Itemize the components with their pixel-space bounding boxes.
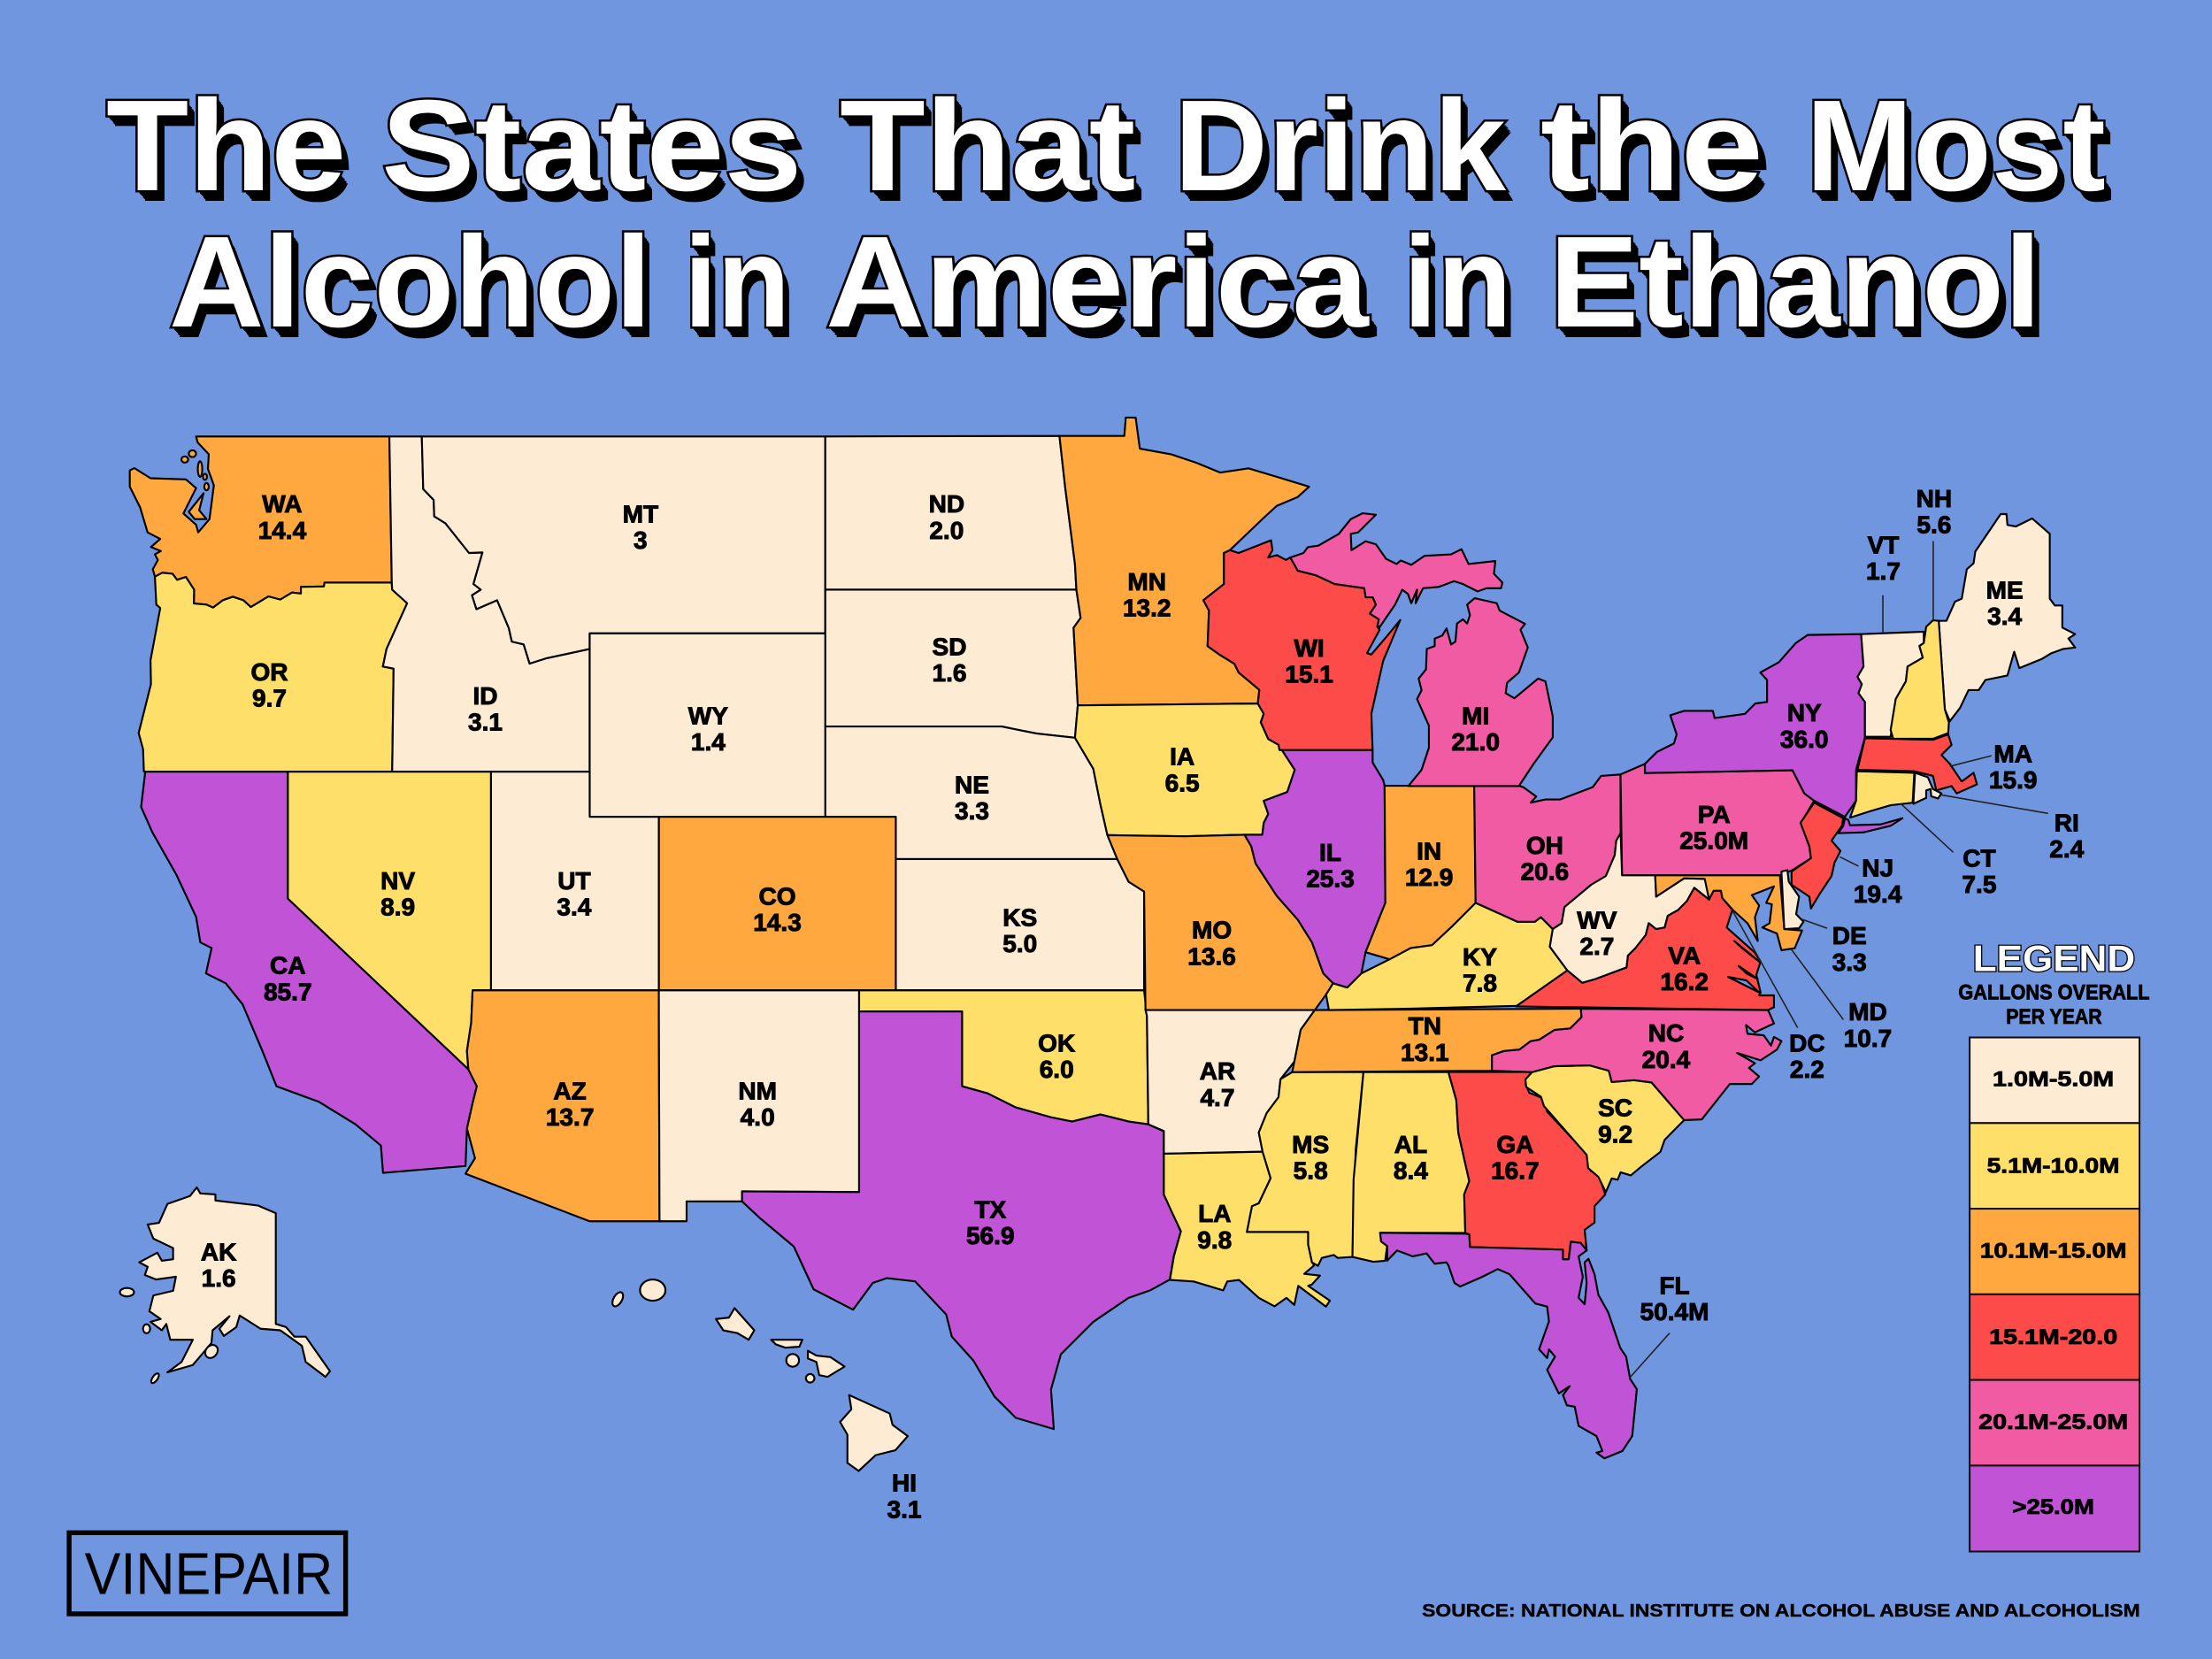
state: Arizona: AZ (553, 1078, 587, 1105)
state: Idaho: ID (472, 682, 498, 710)
state: Oklahoma (859, 990, 1148, 1125)
state: Pennsylvania (1620, 764, 1814, 875)
title line 1: States (381, 73, 803, 219)
state: North Dakota: 2.0 (929, 517, 964, 544)
state: North Carolina: 20.4 (1642, 1046, 1691, 1073)
state: Kentucky: 7.8 (1463, 970, 1497, 997)
state: South Dakota: 1.6 (933, 659, 967, 687)
state: Alabama (1353, 1072, 1470, 1262)
state: Mississippi: MS (1292, 1131, 1329, 1158)
state: Massachusetts: MA (1993, 740, 2032, 767)
state: Mississippi (1247, 1072, 1363, 1266)
state: New Hampshire: NH (1916, 485, 1952, 512)
state: District of Columbia (1732, 909, 1825, 1083)
state: Wisconsin: 15.1 (1285, 661, 1333, 688)
state: New Hampshire: 5.6 (1916, 511, 1951, 539)
state: Louisiana: LA (1198, 1200, 1231, 1227)
state: Missouri (1108, 834, 1333, 1010)
title (105, 73, 2111, 355)
state: Washington (130, 436, 392, 608)
state: Kansas: KS (1002, 903, 1037, 931)
title line 1: The (106, 73, 346, 219)
state: Florida (1380, 1233, 1709, 1458)
state: Georgia: 16.7 (1491, 1157, 1540, 1185)
state: Florida: FL (1659, 1272, 1690, 1300)
state: Alaska (120, 1187, 330, 1385)
state: Nevada: 8.9 (380, 894, 415, 921)
state: Indiana: IN (1417, 837, 1441, 864)
title line 1: That (840, 73, 1135, 219)
state: South Carolina: 9.2 (1598, 1120, 1632, 1148)
state: South Dakota: SD (933, 633, 967, 660)
title line 1: the (1540, 73, 1763, 219)
state: Texas (742, 1011, 1181, 1429)
state: Virginia: VA (1668, 941, 1701, 969)
state: West Virginia: 2.7 (1579, 933, 1614, 960)
state: Maine (1939, 514, 2075, 721)
state: Montana: 3 (634, 526, 648, 554)
state: Minnesota: MN (1127, 568, 1166, 595)
state: Michigan: MI (1462, 702, 1489, 729)
state: New Jersey: 19.4 (1854, 880, 1902, 908)
state: New York: 36.0 (1780, 726, 1829, 753)
title line 1 (105, 73, 2111, 219)
state: Illinois: 25.3 (1306, 865, 1355, 893)
state: Iowa: IA (1170, 743, 1194, 771)
legend row 1 (1970, 1038, 2139, 1123)
state: Arizona: 13.7 (546, 1103, 594, 1131)
legend row 5 (1970, 1380, 2139, 1465)
state: North Carolina: NC (1648, 1019, 1684, 1047)
state: Tennessee (1292, 1009, 1581, 1072)
state: Oregon (139, 572, 407, 772)
state: Wisconsin: WI (1294, 634, 1325, 662)
state: Georgia (1448, 1072, 1605, 1259)
state: Oklahoma: OK (1038, 1029, 1075, 1056)
state: Hawaii: HI (892, 1470, 917, 1497)
state: Massachusetts: 15.9 (1989, 766, 2037, 794)
state: New Jersey: NJ (1862, 855, 1893, 882)
state: Arkansas: AR (1200, 1057, 1235, 1085)
state: Idaho (383, 436, 589, 772)
state: Mississippi: 5.8 (1294, 1157, 1328, 1185)
title line 2: Ethanol (1549, 210, 2041, 355)
state: South Carolina: SC (1598, 1094, 1632, 1122)
state: Connecticut: CT (1962, 844, 1996, 872)
state: Pennsylvania: 25.0M (1679, 827, 1748, 855)
state: Maryland: MD (1848, 998, 1887, 1025)
title line 2 (169, 210, 2041, 355)
state: Nebraska (826, 726, 1118, 859)
state: District of Columbia: DC (1789, 1029, 1825, 1056)
state: Alaska: 1.6 (202, 1264, 236, 1292)
state: Alaska: AK (201, 1238, 236, 1265)
state: New Hampshire (1891, 485, 1952, 739)
state: Rhode Island (1913, 772, 2085, 863)
state: Oregon: OR (250, 658, 288, 686)
state: Tennessee: 13.1 (1401, 1039, 1449, 1066)
state: Vermont: 1.7 (1866, 557, 1901, 585)
source note: SOURCE: NATIONAL INSTITUTE ON ALCOHOL ABUSE AND ALCOHOLISM (1422, 1601, 2140, 1621)
state: Indiana (1365, 786, 1476, 959)
state: Delaware: 3.3 (1832, 949, 1867, 976)
state: Pennsylvania: PA (1698, 801, 1731, 828)
state: Idaho: 3.1 (468, 709, 503, 736)
state: New York: NY (1787, 699, 1822, 726)
state: Illinois (1245, 745, 1386, 987)
state: Arkansas (1146, 1010, 1315, 1154)
state: Kentucky (1326, 902, 1567, 1010)
state: North Carolina (1492, 1009, 1781, 1120)
legend row 2: 5.1M-10.0M (1987, 1155, 2120, 1179)
legend row 3: 10.1M-15.0M (1980, 1239, 2127, 1263)
state: Wisconsin (1203, 541, 1401, 750)
state: Minnesota (1059, 418, 1310, 705)
state: West Virginia: WV (1577, 907, 1617, 934)
state: Maryland (1655, 875, 1892, 1052)
state: Ohio: OH (1526, 832, 1563, 859)
legend heading: LEGEND (1973, 938, 2135, 979)
state: Tennessee: TN (1409, 1012, 1441, 1040)
state: New Mexico (659, 990, 859, 1221)
legend row 1: 1.0M-5.0M (1993, 1068, 2114, 1092)
state: Maine: ME (1986, 576, 2024, 603)
state: Nevada: NV (380, 867, 415, 895)
state: Delaware (1781, 870, 1867, 976)
state: Vermont: VT (1868, 531, 1899, 558)
title line 2: in (1403, 210, 1512, 355)
legend row 5: 20.1M-25.0M (1978, 1410, 2128, 1434)
state: New Mexico: NM (738, 1078, 777, 1105)
state: Oklahoma: 6.0 (1040, 1056, 1074, 1083)
state: Nevada (288, 772, 491, 1070)
state: Arizona (465, 990, 659, 1221)
state: Maine: 3.4 (1987, 603, 2023, 630)
state: Indiana: 12.9 (1405, 864, 1453, 891)
title line 2: America (826, 210, 1369, 355)
state: Kentucky: KY (1463, 943, 1497, 971)
state: Alabama: AL (1394, 1131, 1427, 1158)
state: Colorado (659, 817, 895, 990)
state: Washington: WA (262, 490, 302, 518)
state: Connecticut (1850, 772, 1996, 898)
state: Ohio (1474, 774, 1621, 929)
state: Iowa: 6.5 (1165, 769, 1200, 796)
state: South Carolina (1525, 1065, 1684, 1192)
state: Delaware: DE (1832, 922, 1867, 949)
title line 1: Most (1806, 73, 2106, 219)
state: Vermont (1857, 531, 1924, 737)
logo: VinePair: VINEPAIR (85, 1541, 333, 1608)
legend row 3 (1970, 1209, 2139, 1294)
state: Wyoming: 1.4 (691, 728, 726, 756)
state: Montana: MT (623, 500, 658, 527)
state: Minnesota: 13.2 (1123, 595, 1171, 622)
state: Wyoming: WY (688, 702, 728, 729)
state: Virginia: 16.2 (1660, 968, 1709, 995)
state: Colorado: 14.3 (753, 909, 802, 936)
state: New Mexico: 4.0 (741, 1103, 775, 1131)
title line 1: Drink (1174, 73, 1506, 219)
state: Florida: 50.4M (1640, 1298, 1709, 1325)
state: California (141, 772, 477, 1173)
state: Hawaii: 3.1 (887, 1495, 922, 1523)
state: Rhode Island: 2.4 (2049, 835, 2085, 863)
state: Michigan: 21.0 (1451, 728, 1500, 756)
state: Alabama: 8.4 (1394, 1157, 1428, 1185)
state: District of Columbia: 2.2 (1790, 1056, 1824, 1083)
state: Hawaii (611, 1279, 922, 1523)
state: Kansas: 5.0 (1002, 930, 1037, 957)
state: South Dakota (826, 589, 1080, 738)
state: Texas: 56.9 (966, 1222, 1015, 1249)
state: California: 85.7 (264, 978, 312, 1005)
state: Nebraska: 3.3 (955, 797, 989, 825)
legend (1958, 938, 2150, 1552)
state: Louisiana: 9.8 (1197, 1226, 1232, 1254)
legend row 2 (1970, 1123, 2139, 1209)
legend subtitle: GALLONS OVERALL (1958, 981, 2150, 1005)
legend row 6: >25.0M (2012, 1495, 2094, 1519)
title line 2: in (684, 210, 790, 355)
state: Wyoming (589, 634, 826, 817)
state: Louisiana (1164, 1152, 1330, 1307)
state: North Dakota (826, 436, 1077, 589)
state: Illinois: IL (1319, 839, 1341, 866)
state: Virginia (1516, 887, 1774, 1010)
state: Arkansas: 4.7 (1200, 1084, 1234, 1111)
state: Michigan (1290, 513, 1553, 786)
state: Connecticut: 7.5 (1962, 871, 1996, 898)
state: Utah (491, 772, 659, 990)
legend row 4: 15.1M-20.0 (1989, 1325, 2117, 1349)
state: New York (1645, 634, 1902, 833)
state: West Virginia (1550, 833, 1714, 983)
state: Missouri: MO (1192, 917, 1232, 944)
state: Colorado: CO (758, 882, 796, 910)
title line 2: Alcohol (169, 210, 651, 355)
state: Texas: TX (974, 1195, 1006, 1223)
state: Oregon: 9.7 (252, 685, 287, 712)
legend row 6 (1970, 1465, 2139, 1552)
state: Massachusetts (1857, 734, 2037, 794)
state: Nebraska: NE (955, 772, 989, 799)
state: Utah: 3.4 (557, 894, 592, 921)
state: New Jersey (1792, 803, 1902, 909)
state: California: CA (270, 952, 306, 979)
state: Kansas (895, 859, 1144, 990)
state: Maryland: 10.7 (1844, 1025, 1892, 1052)
state: Montana (422, 436, 826, 664)
state: Ohio: 20.6 (1521, 858, 1569, 886)
legend row 4 (1970, 1294, 2139, 1380)
state: Washington: 14.4 (258, 517, 307, 544)
state: Rhode Island: RI (2055, 810, 2079, 837)
state: Iowa (1075, 703, 1294, 836)
state: Utah: UT (557, 867, 591, 895)
legend subtitle line 2: PER YEAR (2006, 1005, 2102, 1029)
state: Georgia: GA (1496, 1131, 1533, 1158)
state: North Dakota: ND (929, 490, 964, 518)
state: Missouri: 13.6 (1187, 942, 1236, 970)
